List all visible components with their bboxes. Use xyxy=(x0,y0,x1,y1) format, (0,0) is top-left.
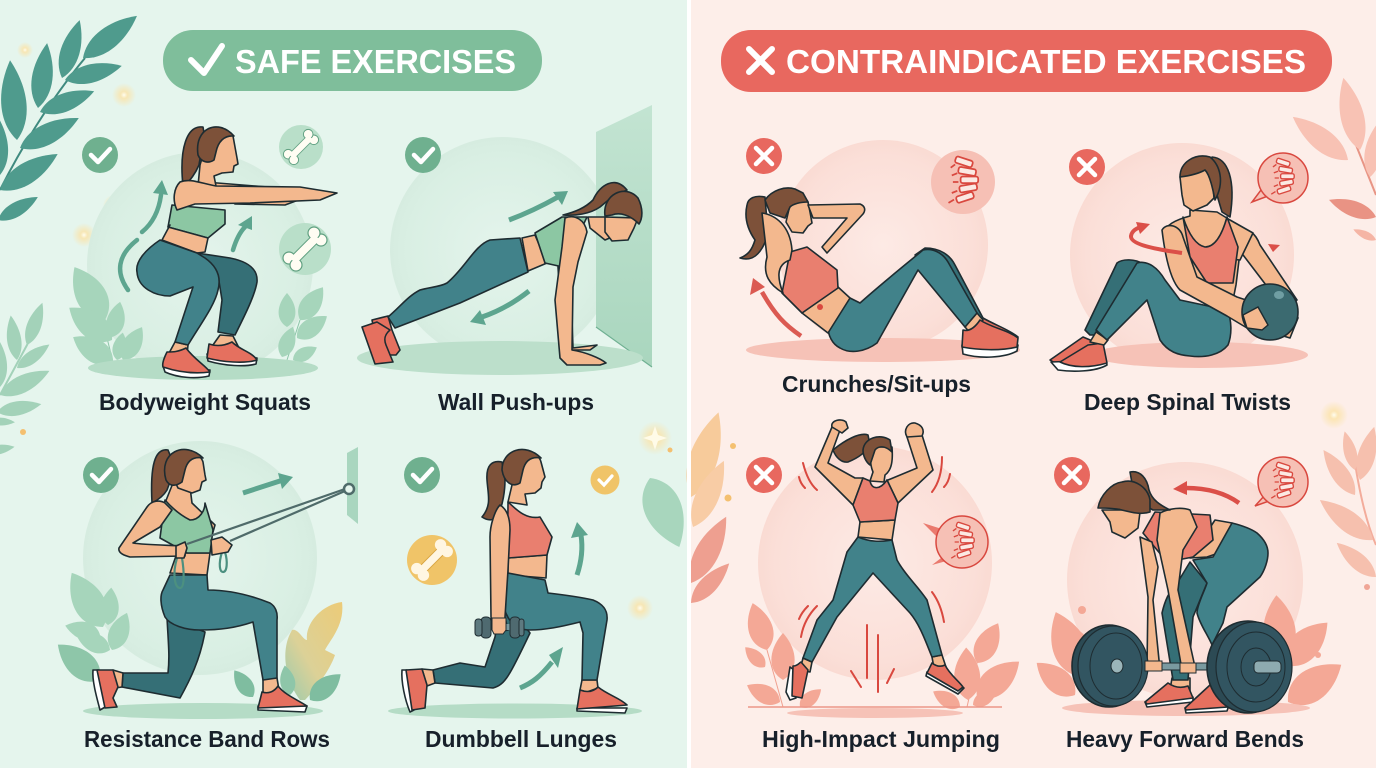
foliage: top right leaves xyxy=(1286,75,1376,244)
figure xyxy=(1050,156,1297,371)
badge: x xyxy=(1054,457,1090,493)
icon: spine bubble xyxy=(1252,153,1308,203)
sparkles xyxy=(17,42,672,621)
barbell xyxy=(1072,621,1292,713)
hands xyxy=(176,537,232,558)
badge: check xyxy=(82,137,118,173)
label: Wall Push-ups xyxy=(438,389,594,415)
badge: check xyxy=(405,137,441,173)
exercise: deep spinal twists xyxy=(1050,143,1308,415)
icon: bone yellow xyxy=(407,535,457,585)
icon: medicine ball xyxy=(1242,284,1298,340)
panel: contraindicated exercises xyxy=(678,0,1376,768)
arrow xyxy=(762,292,801,336)
panel: safe exercises xyxy=(0,0,696,768)
arrows xyxy=(520,535,582,688)
badge: small yellow check xyxy=(590,466,620,494)
exercise: high-impact jumping xyxy=(740,420,1028,752)
label: High-Impact Jumping xyxy=(762,726,1000,752)
figure xyxy=(93,449,307,712)
label: Heavy Forward Bends xyxy=(1066,726,1304,752)
exercise: heavy forward bends xyxy=(1029,457,1350,752)
plate: right xyxy=(1207,621,1292,713)
exercise: wall push-ups xyxy=(357,105,652,415)
divider xyxy=(687,0,691,768)
icon: spine bubble xyxy=(923,516,988,568)
wall xyxy=(596,105,652,367)
icon: spine xyxy=(931,150,995,214)
badge: x xyxy=(746,138,782,174)
figure xyxy=(137,127,337,378)
badge: check xyxy=(83,457,119,493)
figure xyxy=(786,420,964,700)
plants xyxy=(61,260,332,372)
heading: safe exercises xyxy=(163,30,542,91)
exercise: resistance band rows xyxy=(49,441,358,752)
plant: yellow xyxy=(228,602,347,708)
exercise: dumbbell lunges xyxy=(388,449,642,752)
label: Resistance Band Rows xyxy=(84,726,330,752)
ground xyxy=(748,707,1002,718)
arrows xyxy=(120,195,245,290)
icon: spine bubble xyxy=(1255,457,1308,507)
arrows xyxy=(482,197,558,317)
figure xyxy=(362,183,642,365)
label: Bodyweight Squats xyxy=(99,389,311,415)
arrow xyxy=(1186,488,1239,503)
badge: check xyxy=(404,457,440,493)
foliage: bottom right leaves xyxy=(1314,401,1376,590)
foliage: left side leaves xyxy=(678,408,737,609)
heading: contraindicated exercises: CONTRAINDICATED EXERCISES xyxy=(786,43,1306,80)
motion marks xyxy=(799,457,950,692)
plants xyxy=(1029,594,1350,715)
label: Crunches/Sit-ups xyxy=(782,371,971,397)
heading: safe exercises: SAFE EXERCISES xyxy=(235,43,516,80)
label: Dumbbell Lunges xyxy=(425,726,617,752)
wall anchor xyxy=(347,447,358,524)
exercise: crunches sit-ups xyxy=(740,138,1020,397)
arrow xyxy=(243,480,283,493)
arrows xyxy=(1131,226,1182,253)
label: Deep Spinal Twists xyxy=(1084,389,1291,415)
foliage: right edge leaf xyxy=(633,471,696,554)
heading: contraindicated exercises xyxy=(721,30,1332,92)
foliage: left side leaves xyxy=(0,300,53,457)
icon: dumbbell xyxy=(475,617,524,638)
figure xyxy=(402,449,627,713)
icon: bones xyxy=(279,125,331,275)
figure xyxy=(1098,472,1268,713)
plants xyxy=(49,565,136,690)
badge: x xyxy=(746,457,782,493)
foliage: top left leaves xyxy=(0,7,144,226)
badge: x xyxy=(1069,149,1105,185)
plants xyxy=(740,600,1028,714)
spot: pain xyxy=(817,304,823,310)
exercise: bodyweight squats xyxy=(61,125,337,415)
resistance band xyxy=(174,484,354,588)
plate: left xyxy=(1072,625,1148,707)
figure xyxy=(740,188,1018,357)
